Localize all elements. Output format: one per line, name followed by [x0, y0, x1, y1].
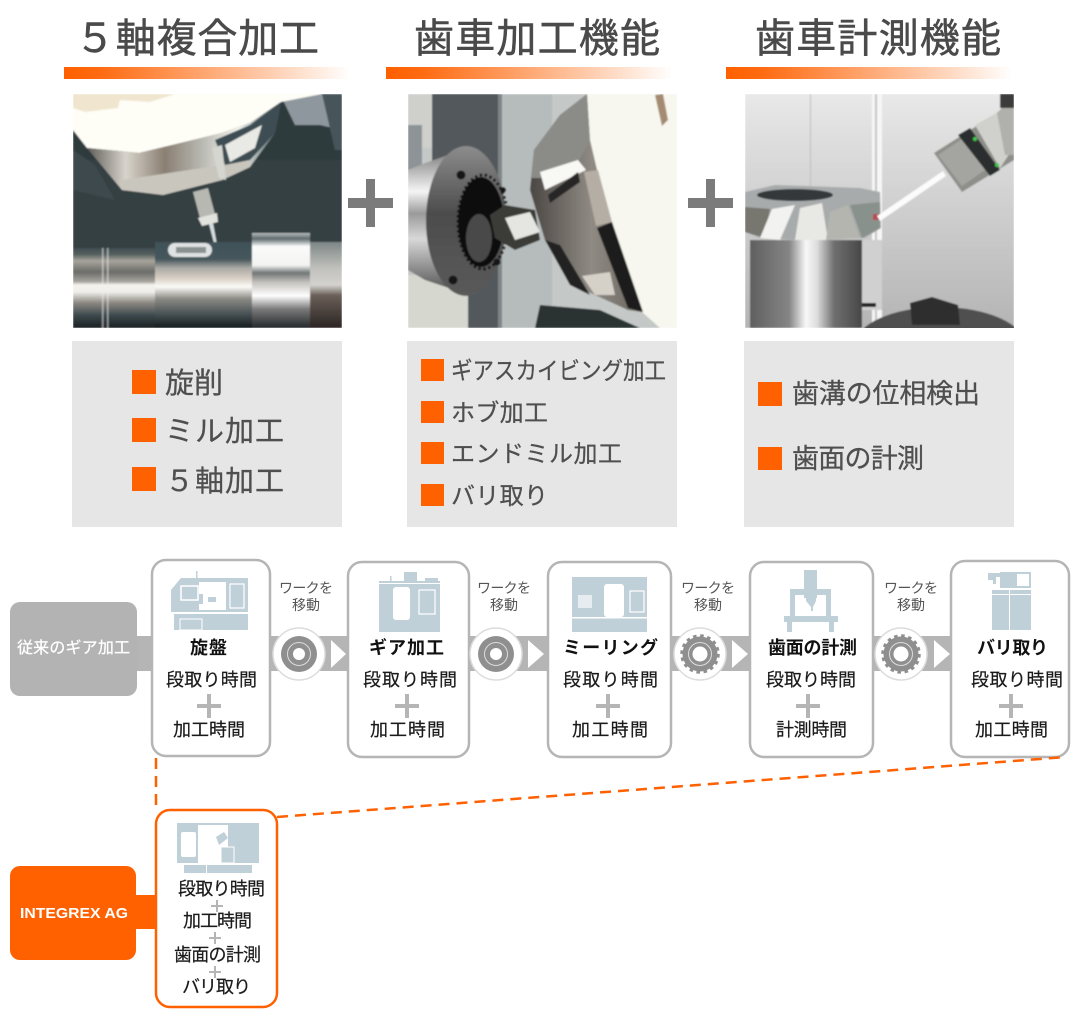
icon: plus between 5-axis and gear machining	[348, 179, 393, 227]
panel: gear measuring functions: 歯溝の位相検出	[792, 379, 980, 409]
move step 4: gear disc: ワークを	[884, 580, 938, 596]
heading: gear machining: 歯車加工機能	[414, 17, 660, 61]
icon: milling machine	[572, 577, 647, 632]
panel: gear machining functions: ギアスカイビング加工	[451, 358, 666, 385]
box: INTEGREX AG integrated process: バリ取り	[182, 977, 251, 997]
label: conventional gear machining	[10, 602, 137, 696]
step: tooth flank measuring: 段取り時間	[766, 670, 856, 690]
heading: 5-axis	[64, 17, 350, 79]
move step 2: workpiece disc: ワークを	[477, 580, 531, 596]
step: tooth flank measuring: 歯面の計測	[768, 638, 857, 658]
step: milling: 段取り時間	[563, 670, 658, 690]
connector band: conventional process	[130, 636, 960, 671]
move step 1: workpiece disc	[273, 580, 346, 680]
icon: lathe	[171, 571, 248, 630]
dashed line: right projection	[277, 757, 1066, 817]
step: gear machining: 段取り時間	[363, 670, 457, 690]
step: milling: ミーリング	[563, 637, 658, 658]
move step 4: gear disc	[875, 580, 950, 680]
move step 3: gear disc: ワークを	[681, 580, 735, 596]
step: lathe: 旋盤	[190, 638, 227, 658]
step: deburring: 加工時間	[975, 720, 1048, 740]
panel: gear machining functions	[407, 341, 677, 527]
step: gear machining: ギア加工	[369, 638, 444, 658]
step: gear machining	[348, 562, 469, 757]
icon: INTEGREX machine	[177, 823, 259, 873]
label: INTEGREX AG: INTEGREX AG	[20, 905, 128, 922]
step: tooth flank measuring: 計測時間	[776, 720, 847, 740]
panel: gear machining functions: バリ取り	[451, 483, 548, 510]
panel: 5-axis functions: ５軸加工	[165, 465, 284, 498]
heading: gear measuring	[726, 17, 1012, 79]
move step 3: gear disc: 移動	[694, 597, 722, 613]
step: deburring: バリ取り	[977, 638, 1048, 658]
move step 2: workpiece disc	[470, 580, 544, 680]
icon: coordinate measuring machine	[784, 570, 838, 632]
panel: 5-axis functions: 旋削	[165, 367, 223, 400]
photo: gear skiving	[408, 94, 677, 328]
panel: gear measuring functions	[744, 341, 1014, 527]
label: conventional gear machining: 従来のギア加工	[17, 639, 130, 657]
icon: plus between gear machining and gear measuring	[688, 179, 733, 227]
step: lathe	[152, 560, 270, 756]
heading: gear measuring: 歯車計測機能	[755, 17, 1001, 61]
move step 1: workpiece disc: 移動	[292, 597, 320, 613]
panel: 5-axis functions	[72, 341, 342, 527]
panel: gear measuring functions: 歯面の計測	[792, 444, 924, 474]
photo: 5-axis spindle machining a shaft	[73, 94, 342, 328]
panel: gear machining functions: エンドミル加工	[451, 441, 622, 468]
step: deburring	[951, 561, 1069, 757]
photo: gear measuring probe	[745, 94, 1014, 328]
move step 4: gear disc: 移動	[897, 597, 925, 613]
step: lathe: 段取り時間	[166, 670, 257, 690]
step: milling: 加工時間	[572, 720, 648, 740]
icon: machining center	[379, 572, 440, 632]
box: INTEGREX AG integrated process: 加工時間	[183, 911, 252, 931]
move step 1: workpiece disc: ワークを	[279, 580, 333, 596]
step: lathe: 加工時間	[173, 720, 245, 740]
panel: 5-axis functions: ミル加工	[165, 416, 284, 448]
move step 3: gear disc	[674, 580, 748, 680]
box: INTEGREX AG integrated process: 段取り時間	[178, 879, 265, 899]
panel: gear machining functions: ホブ加工	[451, 400, 548, 427]
heading: 5-axis: ５軸複合加工	[75, 17, 319, 61]
step: tooth flank measuring	[750, 562, 873, 757]
step: milling	[548, 562, 671, 757]
move step 2: workpiece disc: 移動	[490, 597, 518, 613]
dashed line: left projection	[155, 758, 157, 810]
step: gear machining: 加工時間	[370, 720, 445, 740]
step: deburring: 段取り時間	[971, 670, 1063, 690]
icon: deburring machine	[988, 572, 1031, 630]
label: INTEGREX AG	[10, 866, 158, 960]
box: INTEGREX AG integrated process: 歯面の計測	[174, 945, 261, 965]
box: INTEGREX AG integrated process	[156, 810, 277, 1007]
heading: gear machining	[386, 17, 672, 79]
